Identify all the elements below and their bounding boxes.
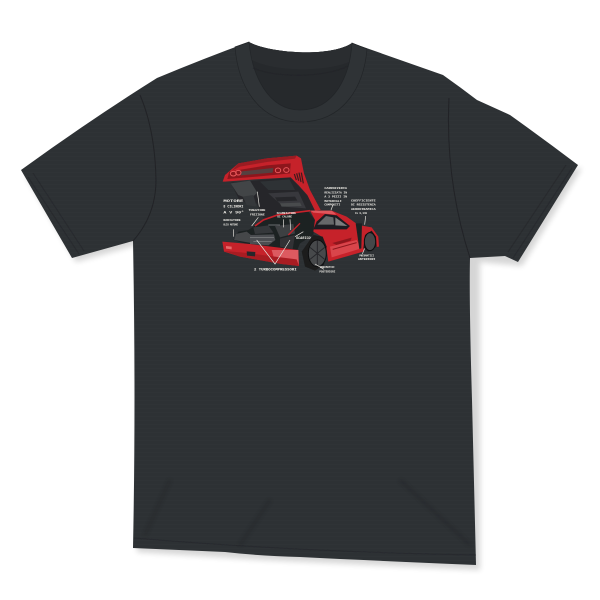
back collar band <box>249 42 352 69</box>
annotations: REALIZZATA IN <box>324 191 347 194</box>
label: engine: MOTORE <box>223 200 245 204</box>
label: rear tyres: PNEUMATICI <box>320 266 335 269</box>
label: exhaust: SCARICO <box>296 236 311 240</box>
label: intake: TUBAZIONE <box>249 209 266 212</box>
underside of engine cover <box>231 177 315 218</box>
annotations: COMPOSITI <box>324 204 341 207</box>
annotations: FRIZIONE <box>250 213 265 216</box>
annotations: A V 90° <box>223 210 244 215</box>
car artwork <box>222 156 379 271</box>
label: turbochargers: 2 TURBOCOMPRESSORI <box>254 268 297 272</box>
back neck inside <box>249 42 352 110</box>
annotations: DI RESISTENZA <box>351 204 376 207</box>
annotations <box>223 187 376 273</box>
annotations: DI CALORE <box>277 216 292 219</box>
annotations: Cx 0,340 <box>355 212 367 215</box>
raised rear engine cover <box>223 156 321 211</box>
annotations: ANTERIORI <box>358 258 376 261</box>
label: drag coefficient: COEFFICIENTE <box>351 199 376 202</box>
rear wheel <box>302 235 327 271</box>
annotations: POSTERIORI <box>319 270 336 273</box>
collar ribbing <box>235 42 367 122</box>
annotations: A 3 PEZZI IN <box>324 196 347 199</box>
annotations: OLIO MOTORE <box>223 223 238 226</box>
label: front tyres: PNEUMATICI <box>359 255 374 258</box>
annotations: MATERIALI <box>324 200 342 203</box>
rear bumper <box>222 242 299 266</box>
car body <box>310 211 379 262</box>
shirt shadow <box>25 168 582 570</box>
leader lines <box>233 192 366 269</box>
front wheel <box>363 231 377 252</box>
car illustration <box>222 156 379 273</box>
fabric folds <box>145 480 470 545</box>
cover vents <box>294 173 303 183</box>
engine compartment <box>233 211 315 252</box>
label: intercooler: SCAMBIATORE <box>277 212 296 215</box>
label: body panels: CARROZZERIA <box>324 187 347 190</box>
annotations: 8 CILINDRI <box>223 206 243 210</box>
label: radiator: RADIATORE <box>223 219 241 222</box>
tail lights <box>230 168 289 176</box>
annotations: AERODINAMICA <box>351 208 376 211</box>
sleeve seams and folds <box>28 66 572 555</box>
